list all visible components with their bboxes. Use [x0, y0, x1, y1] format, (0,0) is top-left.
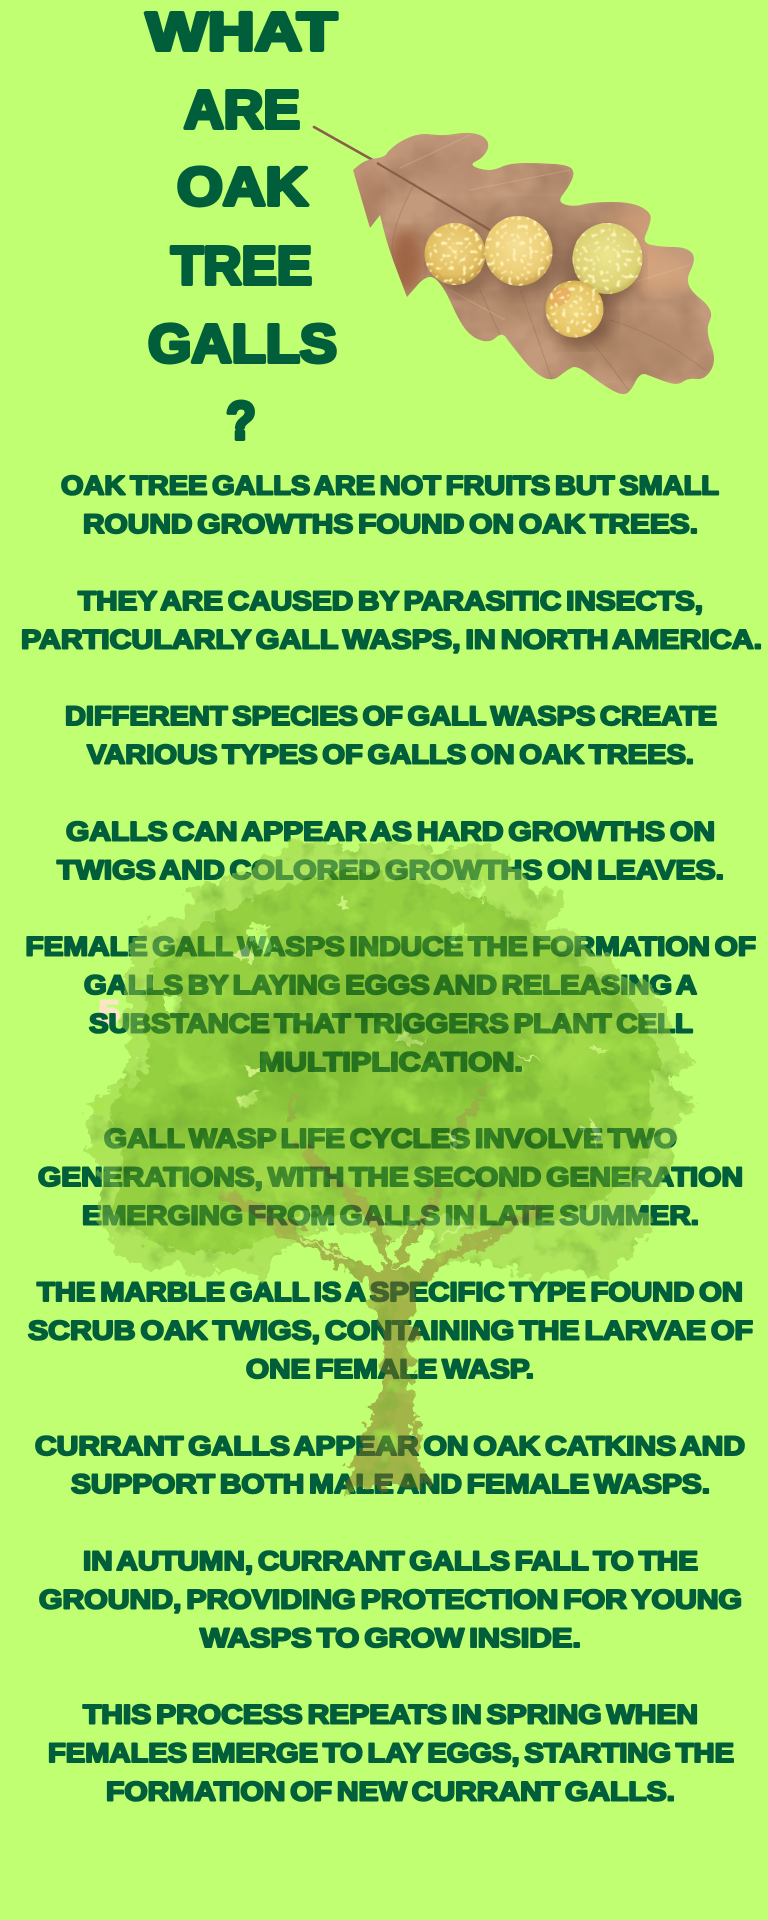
- paragraph: formation: [26, 932, 756, 1077]
- branches: [225, 1090, 535, 1285]
- leaf stem: [314, 127, 378, 163]
- gall 4: [546, 280, 604, 338]
- title: OAK: [177, 157, 308, 217]
- stray pale mark: 5: [98, 994, 120, 1030]
- paragraph: marble gall: ONE FEMALE WASP.: [246, 1354, 534, 1384]
- gall 3: [572, 223, 642, 294]
- paragraph: life cycle: [38, 1124, 743, 1230]
- paragraph: appearance: GALLS CAN APPEAR AS HARD GROWTHS ON: [66, 816, 715, 846]
- paragraph: formation: SUBSTANCE THAT TRIGGERS PLANT CELL: [89, 1008, 693, 1038]
- canopy dark washes: [155, 935, 605, 1200]
- canopy pale flecks and gaps: [165, 885, 610, 1150]
- title: [146, 2, 337, 451]
- title: ARE: [184, 80, 300, 140]
- paragraph: cause: THEY ARE CAUSED BY PARASITIC INSECTS,: [78, 586, 703, 616]
- paragraph: formation: MULTIPLICATION.: [259, 1047, 523, 1077]
- title: WHAT: [146, 2, 337, 62]
- paragraph: autumn: [39, 1546, 742, 1653]
- body text: [21, 470, 762, 1806]
- title: GALLS: [148, 314, 337, 374]
- paragraph: appearance: TWIGS AND COLORED GROWTHS ON LEAVES.: [57, 855, 724, 885]
- paragraph: species: [65, 701, 717, 770]
- paragraph: what galls are: ROUND GROWTHS FOUND ON OAK TREES.: [83, 509, 698, 539]
- paragraph: life cycle: GALL WASP LIFE CYCLES INVOLVE TWO: [104, 1124, 677, 1154]
- paragraph: life cycle: EMERGING FROM GALLS IN LATE SUMMER.: [82, 1200, 699, 1230]
- canopy fringe: [87, 838, 698, 1278]
- paragraph: formation: FEMALE GALL WASPS INDUCE THE FORMATION OF: [26, 932, 756, 962]
- canopy body: [110, 870, 660, 1255]
- paragraph: currant galls: SUPPORT BOTH MALE AND FEMALE WASPS.: [71, 1469, 710, 1499]
- paragraph: spring: [48, 1700, 734, 1806]
- paragraph: spring: FEMALES EMERGE TO LAY EGGS, STARTING THE: [48, 1738, 734, 1768]
- leaf blade: [353, 133, 714, 394]
- paragraph: currant galls: [35, 1431, 745, 1499]
- paragraph: what galls are: OAK TREE GALLS ARE NOT FRUITS BUT SMALL: [61, 470, 719, 500]
- paragraph: formation: GALLS BY LAYING EGGS AND RELEASING A: [84, 970, 697, 1000]
- paragraph: species: VARIOUS TYPES OF GALLS ON OAK TREES.: [87, 740, 694, 770]
- paragraph: what galls are: [61, 470, 719, 539]
- paragraph: species: DIFFERENT SPECIES OF GALL WASPS CREATE: [65, 701, 717, 731]
- paragraph: autumn: WASPS TO GROW INSIDE.: [200, 1623, 581, 1653]
- paragraph: appearance: [57, 816, 724, 885]
- paragraph: currant galls: CURRANT GALLS APPEAR ON OAK CATKINS AND: [35, 1431, 745, 1461]
- paragraph: life cycle: GENERATIONS, WITH THE SECOND GENERATION: [38, 1162, 743, 1192]
- paragraph: marble gall: SCRUB OAK TWIGS, CONTAINING THE LARVAE OF: [28, 1316, 753, 1346]
- paragraph: marble gall: THE MARBLE GALL IS A SPECIFIC TYPE FOUND ON: [37, 1277, 743, 1307]
- illustration: oak leaf with four galls: [314, 127, 714, 394]
- paragraph: spring: FORMATION OF NEW CURRANT GALLS.: [106, 1776, 675, 1806]
- paragraph: cause: [21, 586, 762, 654]
- illustration: translucent watercolour tree: [87, 838, 698, 1490]
- gall shadows: [430, 230, 494, 294]
- paragraph: autumn: GROUND, PROVIDING PROTECTION FOR YOUNG: [39, 1584, 742, 1614]
- paragraph: cause: PARTICULARLY GALL WASPS, IN NORTH AMERICA.: [21, 624, 762, 654]
- paragraph: spring: THIS PROCESS REPEATS IN SPRING WHEN: [83, 1700, 698, 1730]
- title: TREE: [171, 236, 312, 296]
- gall 2: [478, 210, 559, 292]
- paragraph: marble gall: [28, 1277, 753, 1384]
- paragraph: autumn: IN AUTUMN, CURRANT GALLS FALL TO THE: [83, 1546, 698, 1576]
- gall 1: [424, 223, 486, 285]
- trunk: [343, 1268, 428, 1490]
- title: ?: [226, 391, 256, 451]
- leaf shading and veins: [354, 135, 705, 390]
